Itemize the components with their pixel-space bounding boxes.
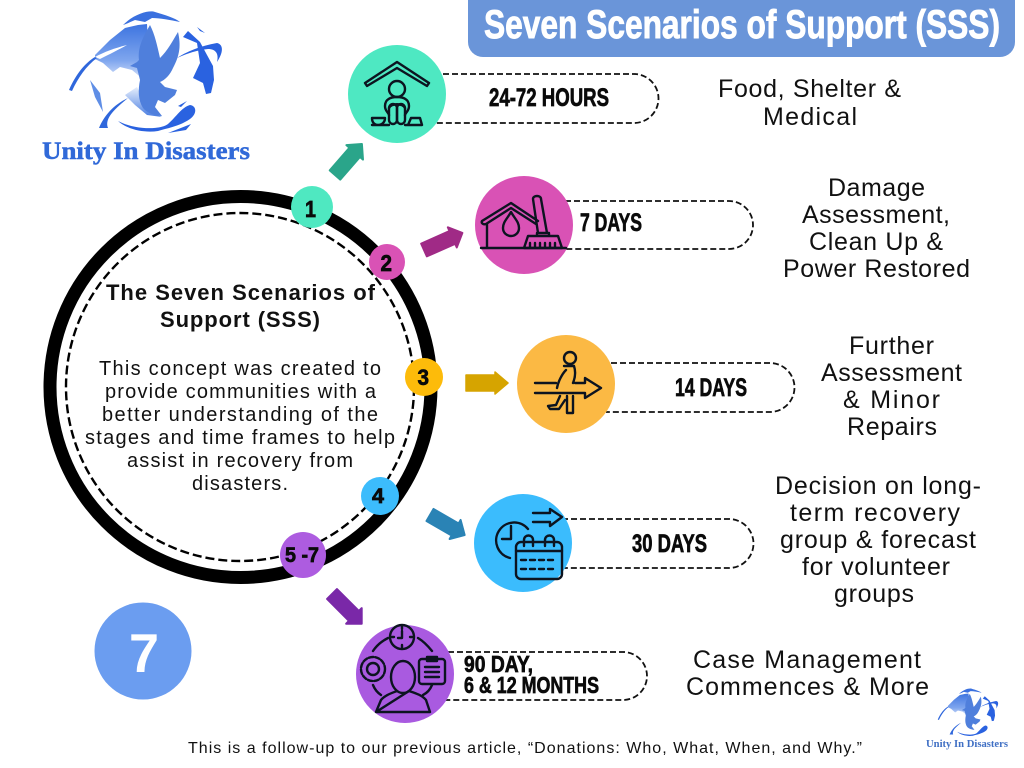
center body text xyxy=(85,358,395,495)
description: Commences & More xyxy=(686,673,929,701)
arrow 2 xyxy=(420,223,467,260)
description xyxy=(718,75,901,131)
center body text: better understanding of the xyxy=(102,404,378,426)
logo: Unity In Disasters xyxy=(42,11,250,165)
duration label: 30 DAYS xyxy=(632,530,707,558)
arrow 5 xyxy=(324,586,369,631)
description: group & forecast xyxy=(780,526,976,554)
center body text: disasters. xyxy=(192,473,288,495)
description: & Minor xyxy=(843,386,940,414)
description: Food, Shelter & xyxy=(718,75,901,103)
arrow 4 xyxy=(424,505,470,545)
node 1: 1 xyxy=(305,196,316,222)
pill outline xyxy=(606,363,795,412)
stage 3: 14 days xyxy=(517,332,962,441)
center heading: Support (SSS) xyxy=(160,307,320,332)
description: Case Management xyxy=(693,646,921,674)
pill outline xyxy=(446,652,647,700)
small wordmark: Unity In Disasters xyxy=(926,739,1008,750)
badge: number 7: 7 xyxy=(129,622,159,684)
icon circle: person under shelter xyxy=(348,45,446,143)
small globe xyxy=(938,689,998,736)
center heading: The Seven Scenarios of xyxy=(106,280,376,305)
icon circle: case manager xyxy=(356,625,454,723)
center body text: assist in recovery from xyxy=(127,450,353,472)
description: Medical xyxy=(763,103,857,131)
duration label: 6 & 12 MONTHS xyxy=(464,672,599,698)
icon circle: clock and calendar xyxy=(474,494,572,592)
description xyxy=(821,332,962,441)
stage 4: 30 days xyxy=(474,472,981,608)
logo globe and dove xyxy=(69,11,222,133)
description: term recovery xyxy=(790,499,960,527)
description: Decision on long- xyxy=(775,472,981,500)
pill outline xyxy=(562,519,754,568)
stage 5-7: 90 day, 6 and 12 months xyxy=(356,625,929,723)
node 2 xyxy=(369,244,405,280)
duration label xyxy=(464,651,599,698)
stage 2: 7 days xyxy=(475,174,970,283)
description: Power Restored xyxy=(783,255,970,283)
center heading xyxy=(106,280,376,332)
arrow 1 xyxy=(327,137,370,182)
icon circle: house and broom xyxy=(475,176,573,274)
description: Damage xyxy=(828,174,925,202)
icon circle: person crossing arrow xyxy=(517,335,615,433)
duration label: 90 DAY, xyxy=(464,651,533,677)
pill outline xyxy=(565,201,753,249)
small logo xyxy=(926,689,1008,750)
stage 1: 24-72 hours xyxy=(348,45,901,143)
node 5-7 xyxy=(280,532,326,578)
central ring panel xyxy=(50,196,431,578)
node 1 xyxy=(291,186,333,228)
pill outline xyxy=(435,74,658,123)
node 3 xyxy=(405,358,443,396)
center body text: This concept was created to xyxy=(99,358,381,380)
node 2: 2 xyxy=(380,250,392,276)
description xyxy=(775,472,981,608)
duration label: 24-72 HOURS xyxy=(489,84,609,112)
description: Assessment xyxy=(821,359,962,387)
duration label: 14 DAYS xyxy=(675,374,747,402)
description: Repairs xyxy=(847,413,937,441)
node 4: 4 xyxy=(372,485,384,508)
center body text: provide communities with a xyxy=(105,381,377,403)
badge: number 7 xyxy=(94,602,192,700)
node 5-7: 5 -7 xyxy=(285,543,319,567)
logo wordmark: Unity In Disasters xyxy=(42,138,250,165)
duration label: 7 DAYS xyxy=(580,209,642,237)
description: for volunteer xyxy=(802,553,950,581)
footer note: This is a follow-up to our previous article, “Donations: Who, What, When, and Why.” xyxy=(188,740,862,757)
node 3: 3 xyxy=(418,365,429,390)
description: Clean Up & xyxy=(809,228,943,256)
description: Further xyxy=(849,332,934,360)
description xyxy=(783,174,970,283)
description xyxy=(686,646,929,701)
arrow 3 xyxy=(466,372,508,394)
node 4 xyxy=(361,477,399,515)
description: Assessment, xyxy=(802,201,950,229)
description: groups xyxy=(834,580,914,608)
center body text: stages and time frames to help xyxy=(85,427,395,449)
